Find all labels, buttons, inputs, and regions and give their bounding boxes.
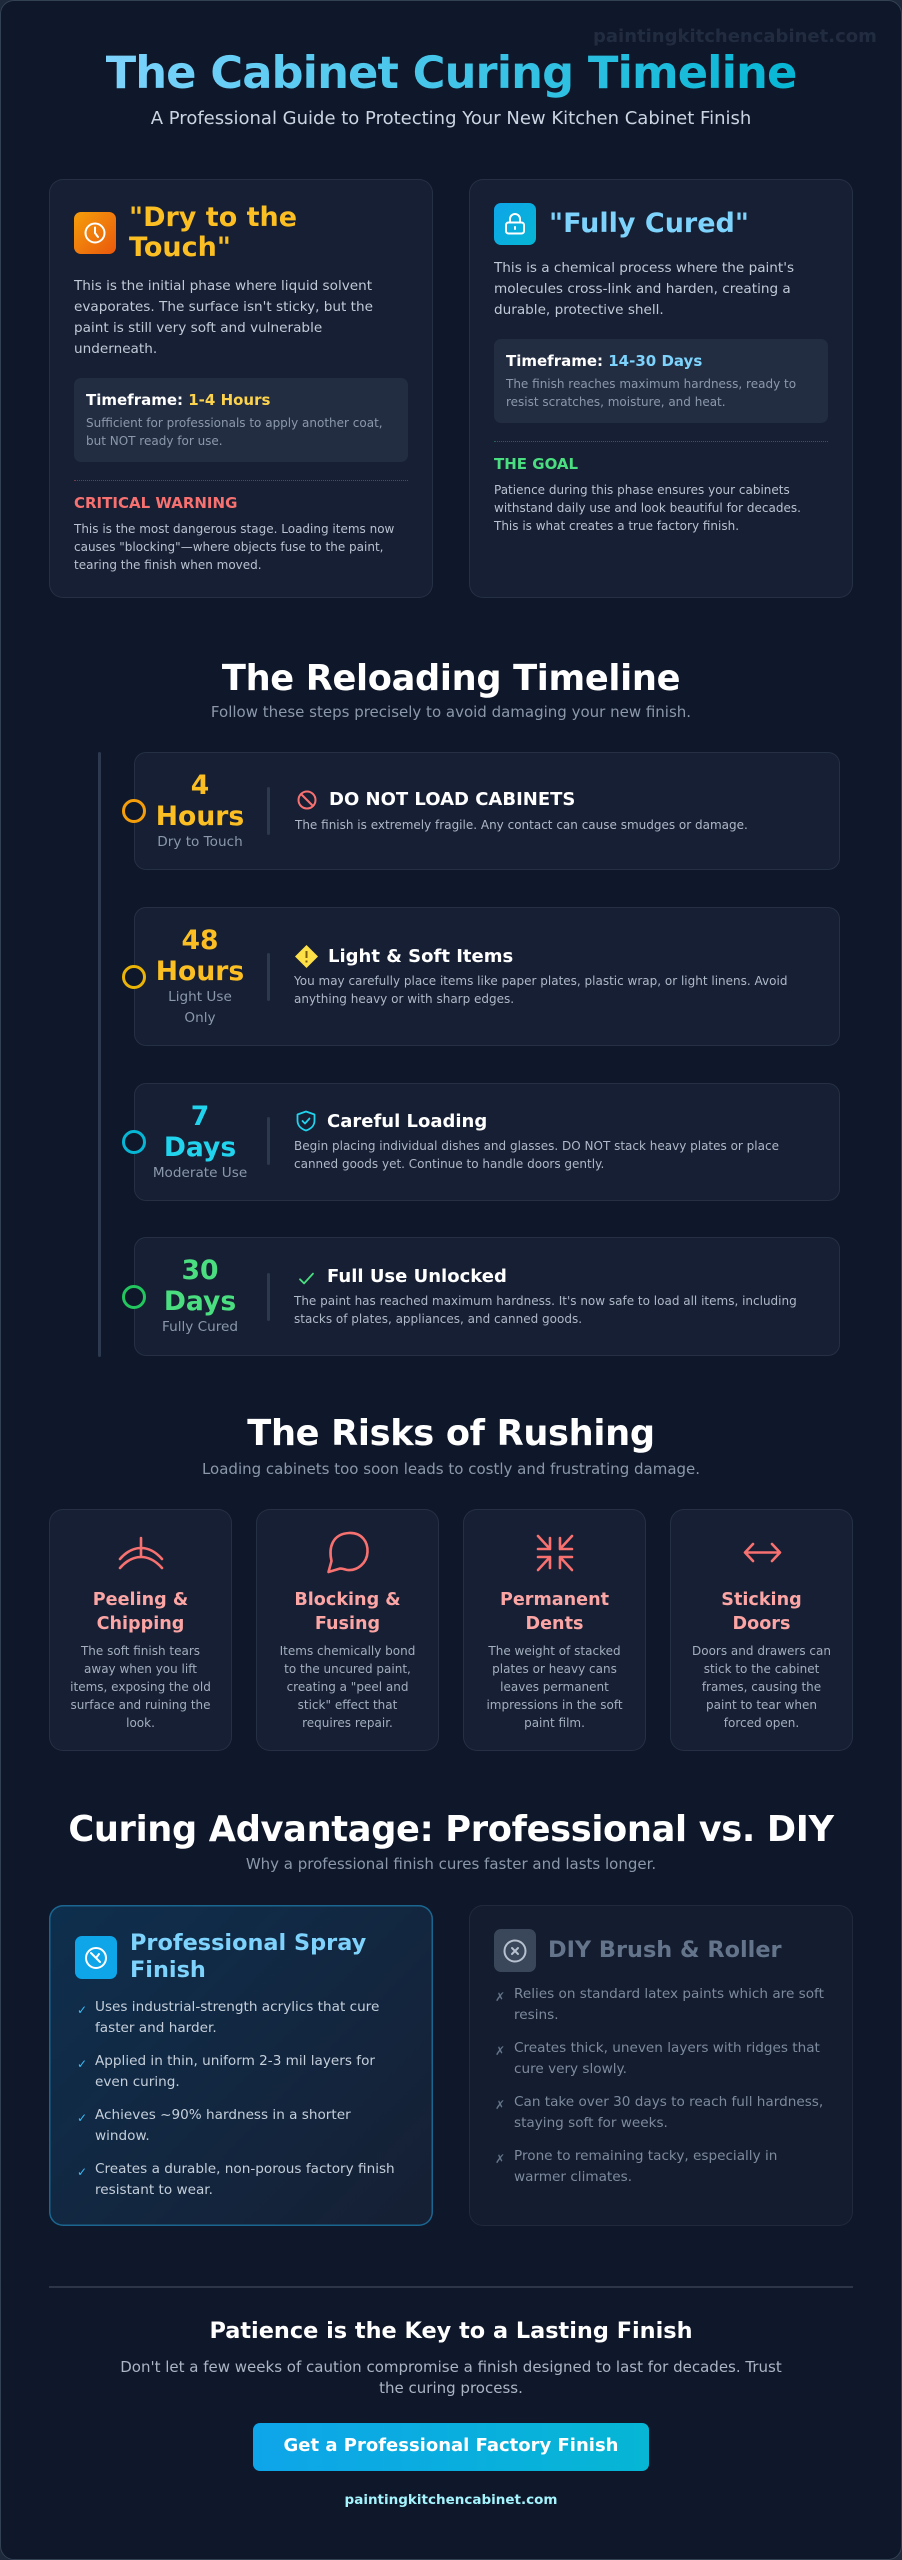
benefit 1: [77, 1998, 379, 2036]
step text: [294, 1139, 779, 1171]
icon: clock: [74, 212, 116, 254]
risk text: creating a "peel and: [287, 1680, 408, 1694]
drawback 1: Relies on standard latex paints which are soft: [514, 1986, 824, 2002]
heading: dry to the touch: Touch": [129, 232, 231, 263]
timeframe note: The finish reaches maximum hardness, ready to: [506, 377, 796, 391]
step title: Light & Soft Items: [328, 946, 513, 967]
risk text: requires repair.: [302, 1716, 393, 1730]
footer link: paintingkitchencabinet.com: [345, 2492, 557, 2508]
risk title: Doors: [733, 1614, 790, 1634]
text: dry description: evaporates. The surface isn't sticky, but the: [74, 299, 373, 315]
risk text: Doors and drawers can: [692, 1644, 831, 1658]
heading: professional spray finish: Finish: [130, 1956, 206, 1982]
subheading: risks of rushing: Loading cabinets too soon leads to costly and frustrating damage.: [202, 1460, 700, 1478]
drawback 3: Can take over 30 days to reach full hardness,: [514, 2094, 823, 2110]
drawback 4: warmer climates.: [514, 2168, 632, 2184]
the goal text: [494, 483, 801, 533]
time: 48 hours: Hours: [156, 956, 244, 986]
panel: professional spray finish: [49, 1905, 433, 2226]
timeline step: 4 hours: [134, 752, 840, 870]
time: 4 hours: Hours: [156, 800, 244, 832]
marker: [122, 799, 146, 823]
the goal text: Patience during this phase ensures your cabinets: [494, 483, 790, 497]
panel: sticking doors: [670, 1509, 853, 1751]
risk text: leaves permanent: [500, 1680, 609, 1694]
heading: risks of rushing: The Risks of Rushing: [247, 1413, 655, 1454]
risk title: [294, 1590, 401, 1634]
icon: check: [299, 1272, 314, 1284]
drawback 1: resins.: [514, 2006, 559, 2022]
drawback 2: Creates thick, uneven layers with ridges that: [514, 2040, 820, 2056]
icon: horizontal arrows: [744, 1542, 782, 1562]
panel: permanent dents: [463, 1509, 646, 1751]
benefit 2: ✓: [77, 2056, 87, 2070]
call to action button: Get a Professional Factory Finish: [284, 2435, 618, 2456]
time: 4 hours: Dry to Touch: [157, 834, 243, 850]
timeframe note: resist scratches, moisture, and heat.: [506, 395, 726, 409]
panel: blocking and fusing: [256, 1509, 439, 1751]
benefit 3: Achieves ~90% hardness in a shorter: [95, 2106, 351, 2122]
drawback 3: staying soft for weeks.: [514, 2114, 668, 2130]
benefit 4: [77, 2160, 395, 2198]
drawback 2: cure very slowly.: [514, 2060, 627, 2076]
marker: [122, 1130, 146, 1154]
footer text: Don't let a few weeks of caution compromise a finish designed to last for decades. Trust: [120, 2358, 782, 2376]
time: 48 hours: Light Use: [168, 988, 232, 1004]
step title: Careful Loading: [327, 1111, 487, 1132]
step text: The paint has reached maximum hardness. It's now safe to load all items, including: [294, 1294, 797, 1308]
step title: DO NOT LOAD CABINETS: [329, 789, 575, 810]
timeframe label: Timeframe: 1-4 Hours: [86, 391, 270, 409]
step text: You may carefully place items like paper plates, plastic wrap, or light linens. Avoid: [294, 974, 787, 988]
heading: reloading timeline: The Reloading Timeline: [222, 658, 680, 699]
step text: canned goods yet. Continue to handle doors gently.: [294, 1157, 604, 1171]
time: 30 days: 30: [181, 1254, 218, 1286]
marker: [122, 965, 146, 989]
risk text: stick to the cabinet: [704, 1662, 819, 1676]
risk title: [500, 1590, 609, 1634]
time: 7 days: [153, 1100, 247, 1180]
risk title: [721, 1590, 802, 1634]
risk text: paint to tear when: [706, 1698, 817, 1712]
text: dry description: This is the initial phase where liquid solvent: [74, 278, 372, 294]
heading: dry to the touch: "Dry to the: [129, 202, 297, 233]
footer text: [1, 2357, 901, 2399]
timeline step: 7 days: [134, 1083, 840, 1201]
step title: Full Use Unlocked: [327, 1266, 507, 1287]
icon: x circle: [494, 1929, 536, 1972]
time: 4 hours: [156, 770, 244, 850]
risk text: forced open.: [724, 1716, 799, 1730]
list: professional benefits: [77, 1998, 395, 2198]
benefit 1: faster and harder.: [95, 2020, 217, 2036]
drawback 1: ✗: [495, 1990, 505, 2004]
heading: professional spray finish: Professional Spray: [130, 1930, 366, 1956]
heading: diy brush and roller: DIY Brush & Roller: [548, 1936, 782, 1962]
subtitle: A Professional Guide to Protecting Your New Kitchen Cabinet Finish: [151, 108, 751, 129]
watermark: paintingkitchencabinet.com: [593, 26, 877, 47]
risk text: look.: [126, 1716, 155, 1730]
text: cured description: This is a chemical process where the paint's: [494, 260, 794, 276]
step text: anything heavy or with sharp edges.: [294, 992, 514, 1006]
text: dry description: [74, 278, 373, 357]
drawback 4: ✗: [495, 2152, 505, 2166]
risk text: stick" effect that: [298, 1698, 397, 1712]
benefit 4: Creates a durable, non-porous factory finish: [95, 2160, 395, 2176]
timeframe note: [86, 416, 383, 448]
marker: [122, 1285, 146, 1309]
heading: fully cured: "Fully Cured": [549, 208, 749, 239]
time: 7 days: Moderate Use: [153, 1164, 247, 1180]
risk title: Permanent: [500, 1590, 609, 1610]
text: dry description: paint is still very soft and vulnerable: [74, 320, 322, 336]
icon: peeling: [118, 1536, 164, 1570]
step text: Begin placing individual dishes and glasses. DO NOT stack heavy plates or place: [294, 1139, 779, 1153]
benefit 2: [77, 2052, 375, 2090]
risk title: Dents: [526, 1614, 583, 1634]
the goal heading: THE GOAL: [494, 455, 578, 473]
risk text: to the uncured paint,: [284, 1662, 411, 1676]
panel: diy brush and roller: [469, 1905, 853, 2226]
risk title: Peeling &: [93, 1590, 188, 1610]
risk text: The weight of stacked: [488, 1644, 621, 1658]
risk text: surface and ruining the: [70, 1698, 211, 1712]
text: cured description: molecules cross-link and harden, creating a: [494, 280, 791, 296]
timeframe note: but NOT ready for use.: [86, 434, 223, 448]
risk text: frames, causing the: [702, 1680, 821, 1694]
benefit 3: ✓: [77, 2110, 87, 2124]
benefit 4: ✓: [77, 2164, 87, 2178]
step text: [294, 974, 787, 1006]
critical warning heading: CRITICAL WARNING: [74, 494, 237, 512]
time: 48 hours: 48: [181, 924, 218, 956]
risk text: The soft finish tears: [81, 1644, 200, 1658]
drawback 2: [495, 2038, 820, 2080]
risk text: Items chemically bond: [280, 1644, 415, 1658]
risk title: Chipping: [97, 1614, 184, 1634]
risk text: [280, 1644, 415, 1730]
critical warning text: causes "blocking"—where objects fuse to the paint,: [74, 540, 384, 554]
benefit 2: Applied in thin, uniform 2-3 mil layers for: [95, 2052, 375, 2068]
icon: spray clock: [75, 1936, 117, 1979]
text: dry description: underneath.: [74, 341, 157, 357]
icon: warning diamond: [295, 945, 318, 968]
timeframe label: Timeframe: 14-30 Days: [506, 352, 702, 370]
risk text: plates or heavy cans: [492, 1662, 617, 1676]
time: 30 days: Fully Cured: [162, 1318, 238, 1334]
icon: speech bubble: [327, 1532, 369, 1574]
text: cured description: durable, protective shell.: [494, 302, 664, 318]
risk text: impressions in the soft: [486, 1698, 623, 1712]
risk title: [93, 1590, 188, 1634]
drawback 4: Prone to remaining tacky, especially in: [514, 2148, 777, 2164]
drawback 1: [495, 1984, 824, 2026]
risk text: paint film.: [524, 1716, 585, 1730]
timeframe note: Sufficient for professionals to apply another coat,: [86, 416, 383, 430]
risk text: away when you lift: [84, 1662, 197, 1676]
time: 30 days: Days: [164, 1286, 236, 1316]
timeframe box: 14-30 days: [494, 339, 828, 423]
time: 48 hours: [156, 924, 244, 1026]
icon: lock: [494, 203, 536, 245]
timeline line: [98, 752, 101, 1357]
icon: shield check: [296, 1110, 316, 1132]
timeframe note: [506, 377, 796, 409]
drawback 3: ✗: [495, 2098, 505, 2112]
list: diy drawbacks: [495, 1986, 824, 2184]
panel: peeling and chipping: [49, 1509, 232, 1751]
icon: compress arrows: [536, 1534, 574, 1572]
subheading: reloading timeline: Follow these steps precisely to avoid damaging your new finish.: [211, 703, 691, 721]
subheading: curing advantage: Why a professional finish cures faster and lasts longer.: [246, 1855, 656, 1873]
drawback 3: [495, 2092, 823, 2134]
drawback 4: [495, 2146, 777, 2188]
critical warning text: [74, 522, 394, 572]
risk title: Sticking: [721, 1590, 802, 1610]
risk text: [692, 1644, 831, 1730]
time: 4 hours: 4: [191, 770, 209, 800]
time: 30 days: [162, 1254, 238, 1334]
heading: curing advantage: Curing Advantage: Professional vs. DIY: [68, 1809, 834, 1850]
panel: fully cured: [469, 179, 853, 598]
benefit 2: even curing.: [95, 2074, 180, 2090]
title: The Cabinet Curing Timeline: [106, 46, 796, 99]
critical warning text: tearing the finish when moved.: [74, 558, 262, 572]
time: 7 days: Days: [164, 1132, 236, 1162]
critical warning text: This is the most dangerous stage. Loading items now: [74, 522, 394, 536]
timeline step: 48 hours: [134, 907, 840, 1046]
call to action button: [253, 2423, 649, 2471]
benefit 3: [77, 2106, 351, 2144]
risk text: [70, 1644, 211, 1730]
drawback 2: ✗: [495, 2044, 505, 2058]
time: 48 hours: Only: [184, 1010, 216, 1026]
step text: The finish is extremely fragile. Any contact can cause smudges or damage.: [295, 818, 748, 832]
timeframe box: 1-4 hours: [74, 378, 408, 462]
heading: dry to the touch: [129, 202, 297, 263]
panel: dry to the touch: [49, 179, 433, 598]
benefit 1: Uses industrial-strength acrylics that cure: [95, 1998, 379, 2014]
text: cured description: [494, 260, 794, 318]
heading: professional spray finish: [130, 1930, 366, 1982]
icon: ban: [298, 790, 316, 810]
benefit 4: resistant to wear.: [95, 2182, 213, 2198]
step text: [294, 1294, 797, 1326]
footer text: the curing process.: [379, 2379, 523, 2397]
footer heading: Patience is the Key to a Lasting Finish: [209, 2318, 693, 2344]
timeline step: 30 days: [134, 1237, 840, 1356]
benefit 3: window.: [95, 2128, 150, 2144]
the goal text: withstand daily use and look beautiful for decades.: [494, 501, 801, 515]
risk text: items, exposing the old: [70, 1680, 211, 1694]
risk title: Fusing: [315, 1614, 380, 1634]
risk title: Blocking &: [294, 1590, 401, 1610]
the goal text: This is what creates a true factory finish.: [494, 519, 739, 533]
step text: stacks of plates, appliances, and canned goods.: [294, 1312, 582, 1326]
benefit 1: ✓: [77, 2002, 87, 2016]
risk text: [486, 1644, 623, 1730]
time: 7 days: 7: [191, 1100, 209, 1132]
